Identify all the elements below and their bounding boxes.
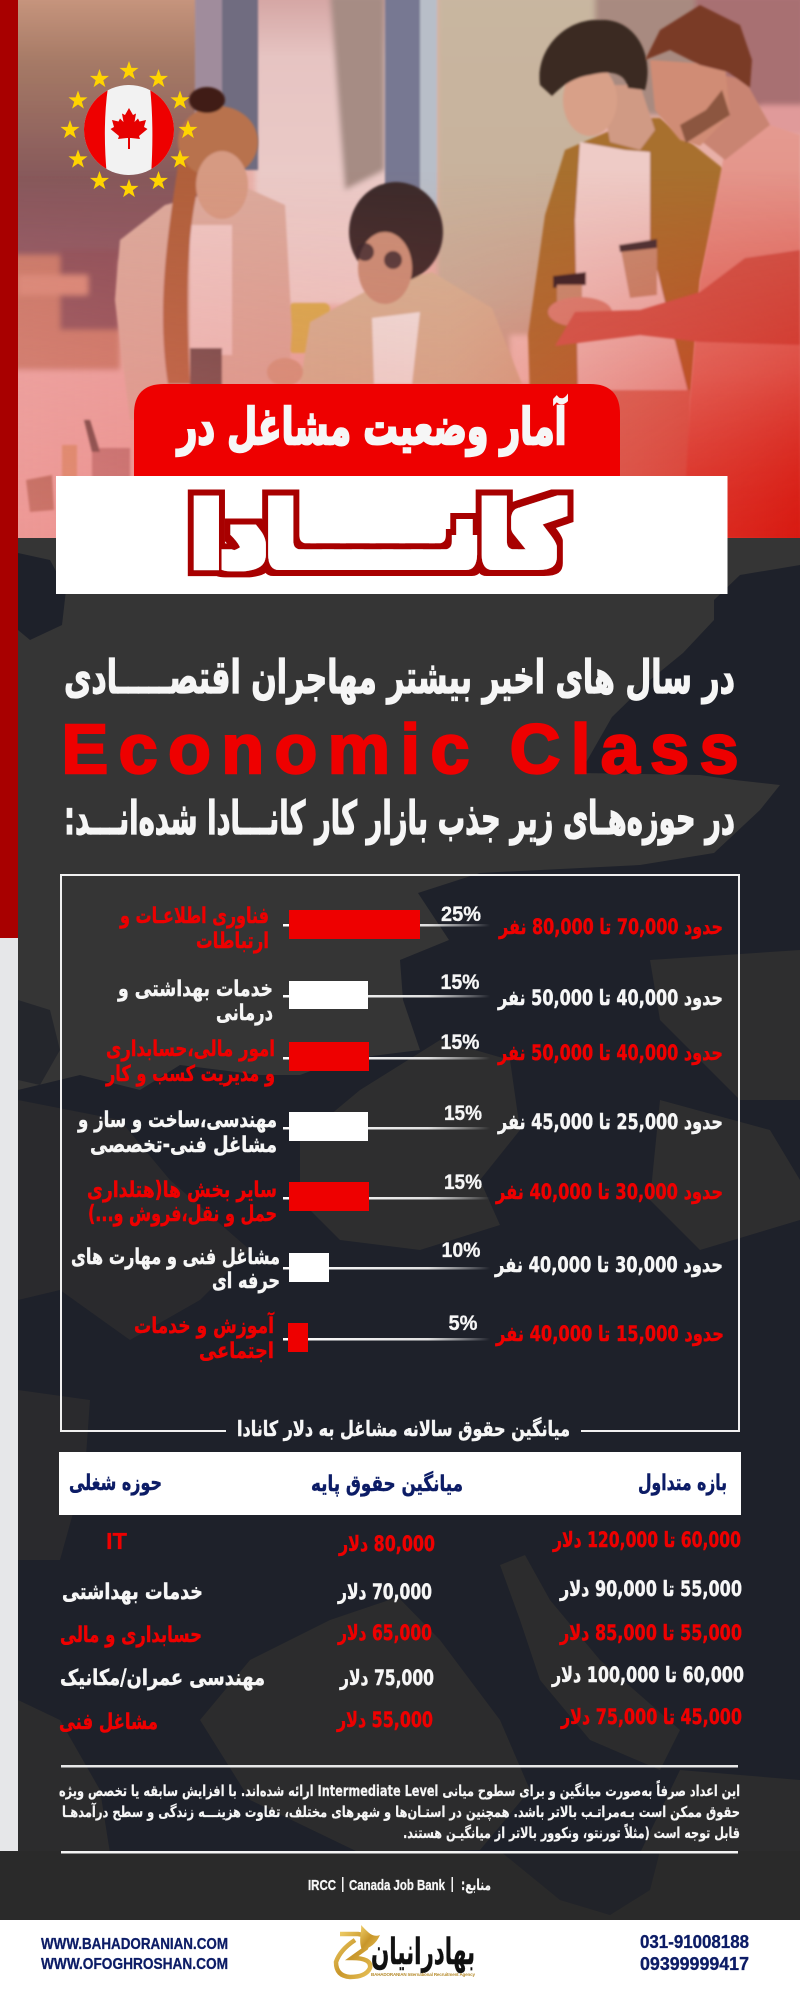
row: finance: امور مالی،حسابداری [106,1037,275,1062]
logo: BAHADORANIAN International Recruitment Agency [371,1972,475,1977]
row: healthcare: 15% [440,971,480,994]
heading: Economic Class: Economic Class [62,710,738,788]
row: engineering: حدود 25,000 تا 45,000 نفر [497,1110,723,1134]
row: accounting salary [60,1621,742,1648]
table header: حوزه شغلی [69,1471,162,1496]
row: technical salary: 55,000 دلار [336,1708,433,1732]
sources: Canada Job Bank [349,1877,445,1894]
table header: بازه متداول [638,1471,727,1496]
row: finance: حدود 40,000 تا 50,000 نفر [497,1041,723,1065]
website links [41,1936,228,1973]
row: healthcare: خدمات بهداشتی و [117,977,273,1002]
row: healthcare salary [62,1577,742,1605]
row: IT salary: 60,000 تا 120,000 دلار [552,1528,741,1552]
row: other sectors: سایر بخش ها(هتلداری [87,1178,277,1203]
hero photo: colleagues around a desk [10,0,800,540]
row: other sectors: حمل و نقل،فروش و...) [88,1202,277,1227]
row: healthcare [117,971,723,1026]
sources [308,1876,491,1894]
desk objects [26,420,130,512]
row: education: 5% [448,1312,478,1335]
row: finance [105,1031,723,1087]
row: engineering salary: مهندسی عمران/مکانیک [60,1666,265,1691]
sources: IRCC [308,1877,336,1894]
row: engineering: مشاغل فنی-تخصصی [90,1133,277,1158]
row: healthcare salary: 70,000 دلار [337,1580,432,1604]
row: IT salary: IT [106,1528,127,1554]
row: other sectors [87,1171,723,1227]
logo: بهادرانیان [371,1932,475,1973]
row: skilled trades: 10% [442,1239,481,1262]
panel: employment share bar chart [61,875,739,1431]
row: engineering: مهندسی،ساخت و ساز و [77,1108,277,1133]
left accent strip [0,0,18,1920]
table header: میانگین حقوق پایه [311,1470,463,1497]
footnote [59,1765,740,1854]
row: skilled trades: مشاغل فنی و مهارت های [71,1245,280,1270]
sources: منابع: [461,1876,491,1894]
logo [336,1925,475,1977]
row: finance: و مدیریت کسب و کار [105,1062,275,1087]
row: engineering salary [60,1663,744,1691]
title: white banner with Canada [56,476,728,594]
row: IT: ارتباطات [196,929,269,954]
row: IT salary: 80,000 دلار [338,1532,435,1556]
row: healthcare: درمانی [216,1001,273,1026]
row: education: اجتماعی [199,1339,274,1364]
title: white banner with Canada: کانـــــادا [192,487,563,586]
tinted overlay [18,192,800,538]
title: red tab: آمار وضعیت مشاغل در [175,396,568,457]
row: engineering salary: 60,000 تا 100,000 دلار [551,1663,744,1687]
row: IT: فناوری اطلاعـات و [119,904,269,929]
person: woman with long hair [115,87,292,420]
row: other sectors: 15% [444,1171,482,1194]
person: man in pink t-shirt [555,5,800,538]
row: accounting salary: 65,000 دلار [337,1621,432,1645]
window frames [195,0,437,225]
row: technical salary [59,1705,742,1735]
row: engineering: 15% [444,1102,482,1125]
row: education: حدود 15,000 تا 40,000 نفر [495,1322,724,1346]
intro heading [62,650,738,845]
row: healthcare salary: 55,000 تا 90,000 دلار [559,1577,742,1601]
table header [59,1452,741,1515]
row: skilled trades: حرفه ای [212,1269,280,1294]
website links: WWW.OFOGHROSHAN.COM [41,1956,228,1973]
row: technical salary: 45,000 تا 75,000 دلار [560,1705,742,1729]
row: skilled trades: حدود 30,000 تا 40,000 نفر [494,1253,723,1277]
row: accounting salary: 55,000 تا 85,000 دلار [559,1621,742,1645]
salary table caption: میانگین حقوق سالانه مشاغل به دلار کانادا [237,1416,570,1441]
row: other sectors: حدود 30,000 تا 40,000 نفر [495,1180,723,1204]
phone numbers [640,1932,749,1974]
row: accounting salary: حسابداری و مالی [60,1623,202,1648]
row: finance: 15% [440,1031,480,1054]
row: skilled trades [71,1239,723,1294]
row: education: آموزش و خدمات [134,1311,274,1339]
row: IT: 25% [441,903,481,926]
table rows: salary data [59,1528,744,1735]
row: engineering [77,1102,723,1158]
icon: Canadian flag badge with ring of stars [60,61,198,197]
person: seated woman with glasses [267,182,522,386]
row: technical salary: مشاغل فنی [59,1710,158,1735]
background world map texture [18,538,800,1920]
row: IT: حدود 70,000 تا 80,000 نفر [498,915,723,939]
row: IT [119,903,723,954]
person: curly-haired man [528,20,725,480]
row: IT salary [106,1528,741,1556]
footer bar [0,1920,800,2000]
row: education [134,1311,724,1364]
phone numbers: 09399999417 [640,1954,749,1974]
row: healthcare: حدود 40,000 تا 50,000 نفر [497,986,723,1010]
phone numbers: 031-91008188 [640,1932,749,1952]
row: healthcare salary: خدمات بهداشتی [62,1580,203,1605]
row: engineering salary: 75,000 دلار [339,1666,434,1690]
title: red tab [134,384,620,480]
website links: WWW.BAHADORANIAN.COM [41,1936,228,1953]
